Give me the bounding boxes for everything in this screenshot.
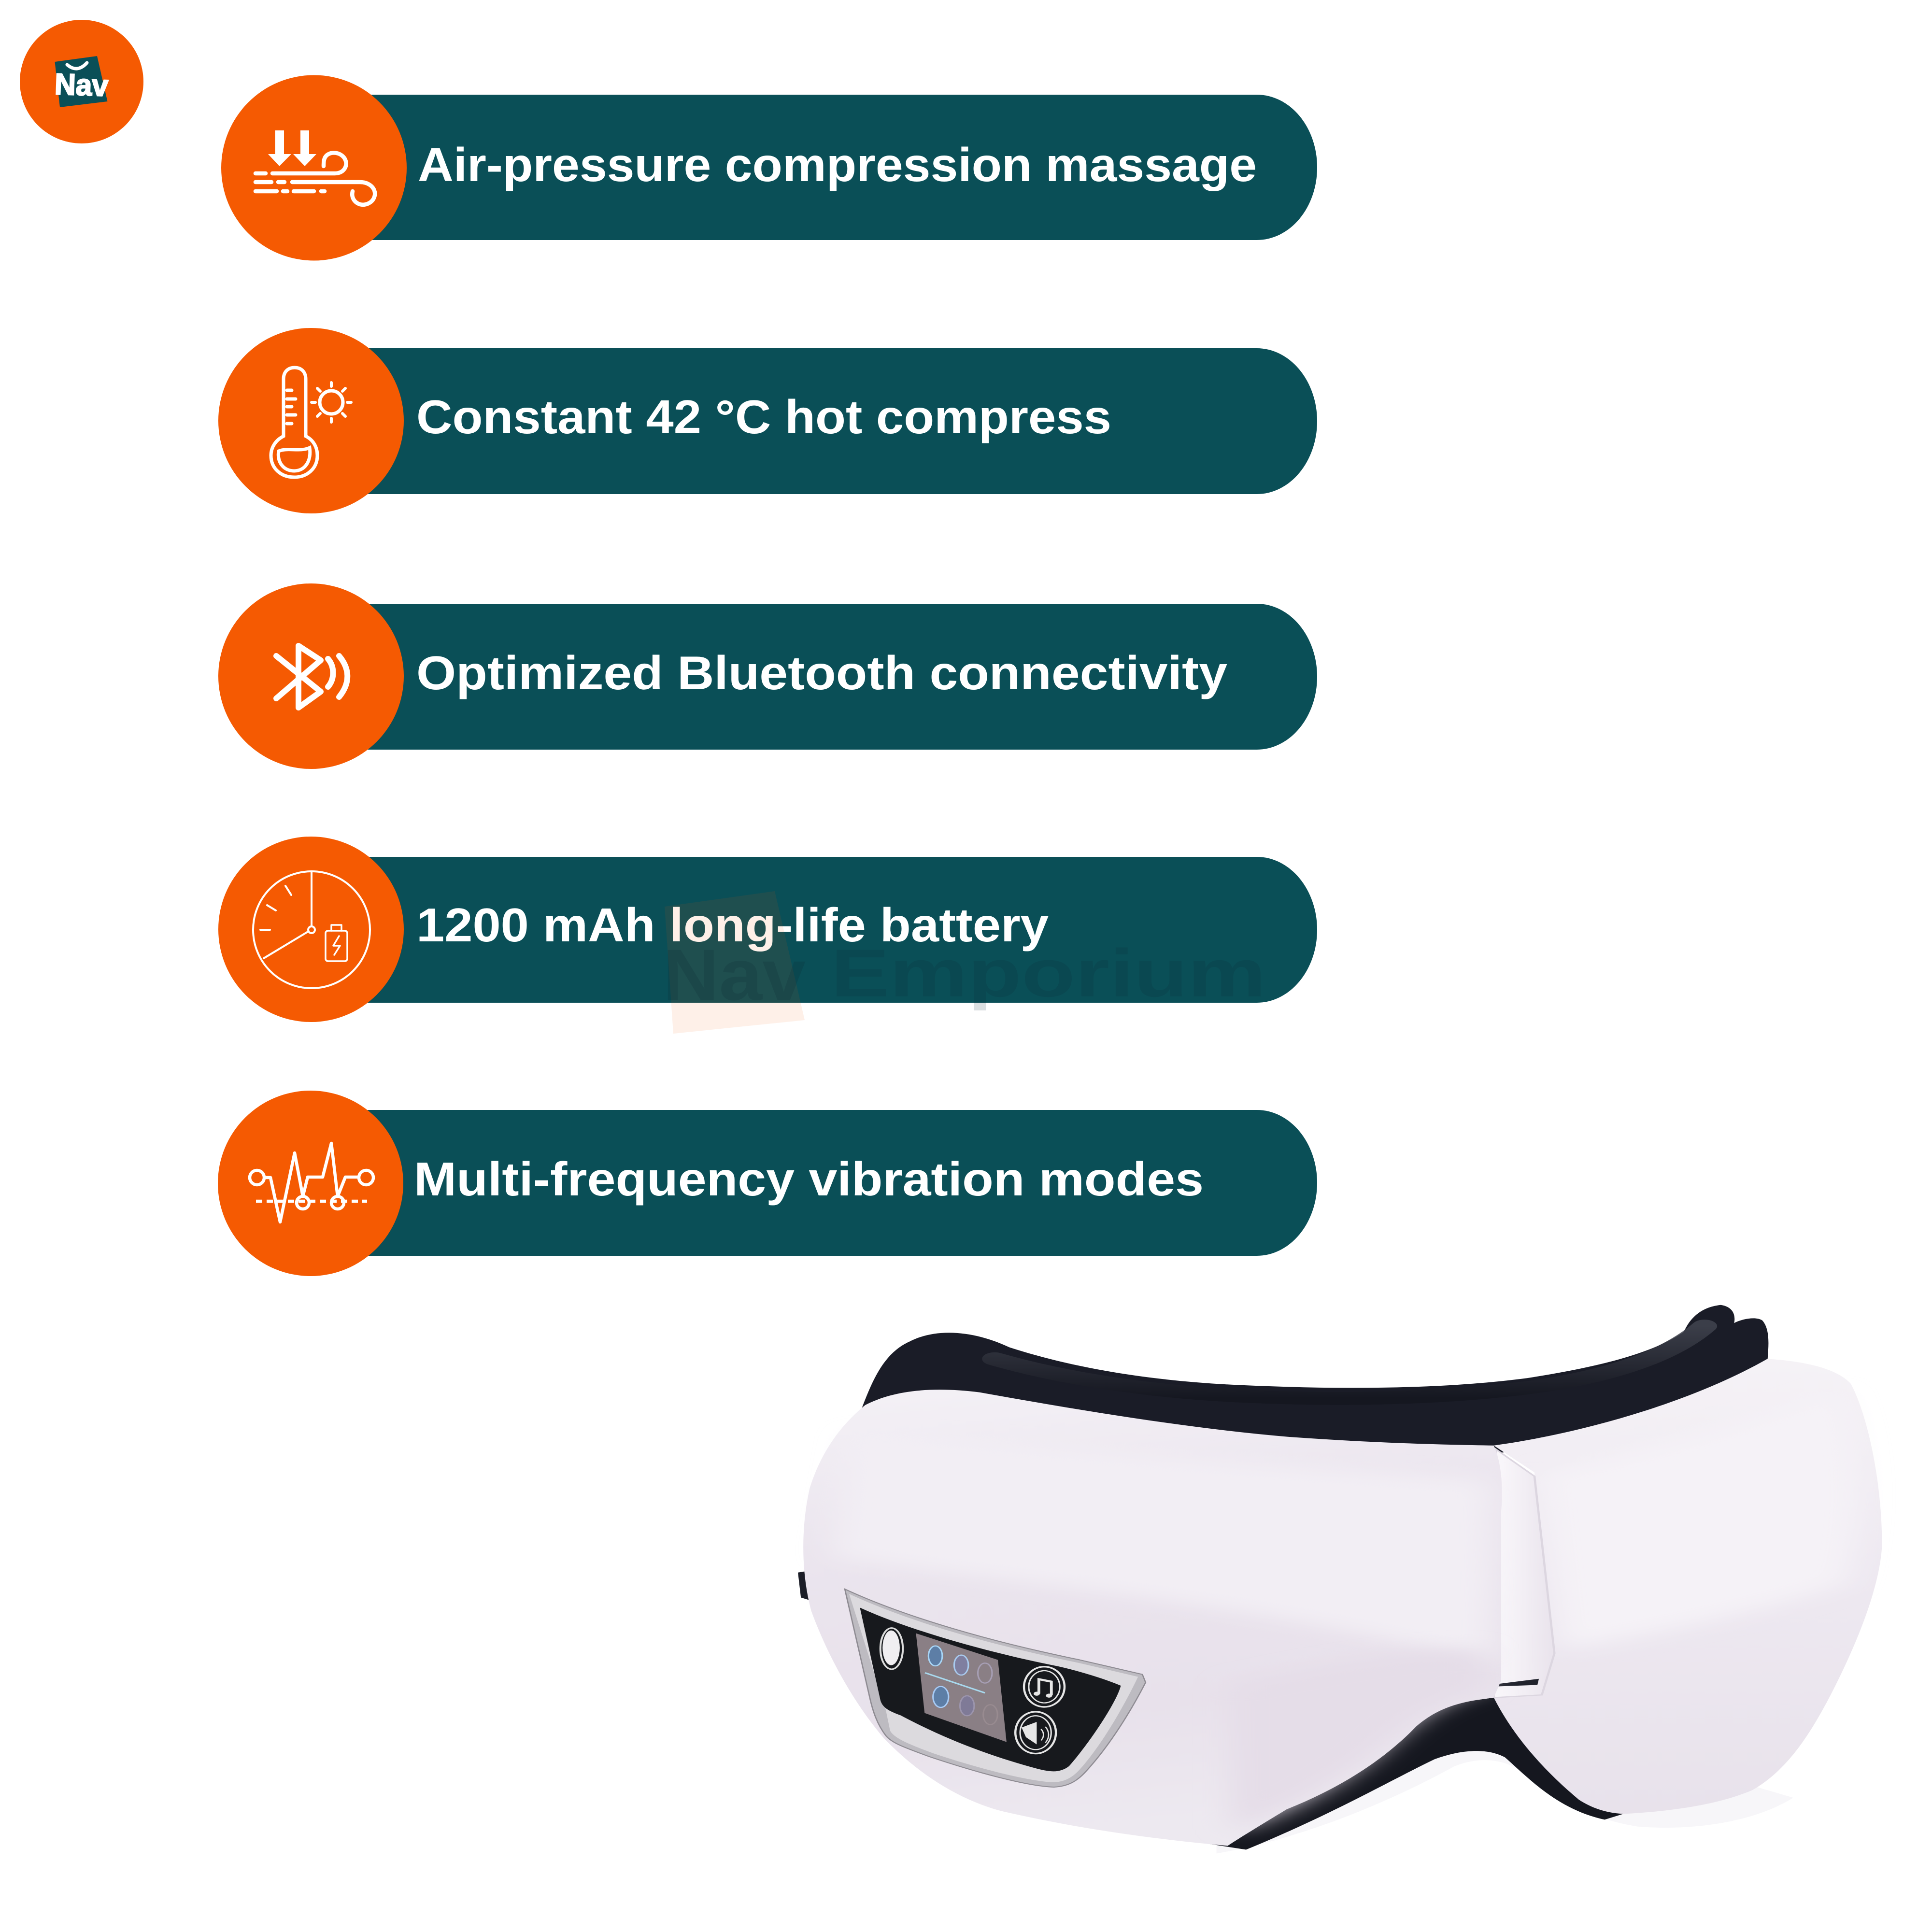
central hinge bbox=[1494, 1449, 1554, 1698]
screen icons bbox=[925, 1646, 997, 1725]
power button bbox=[881, 1628, 903, 1669]
control panel bbox=[845, 1589, 1146, 1787]
icon: clock and battery bbox=[218, 837, 404, 1022]
icon: vibration waveform bbox=[218, 1091, 403, 1276]
icon: bluetooth signal bbox=[218, 583, 404, 769]
left shell bbox=[803, 1390, 1502, 1846]
icon: thermometer and sun bbox=[218, 328, 404, 513]
icon: air pressure compression bbox=[221, 75, 407, 261]
strap highlight bbox=[994, 1326, 1705, 1398]
text: feature 4: 1200 mAh long-life battery bbox=[416, 898, 1049, 952]
logo badge bbox=[20, 20, 143, 143]
touch screen bbox=[916, 1634, 1007, 1742]
panel: feature 3 pill bbox=[309, 604, 1317, 750]
nose bridge black bbox=[1209, 1698, 1623, 1850]
panel bezel highlight bbox=[849, 1594, 1138, 1782]
text: feature 5: Multi-frequency vibration modes bbox=[414, 1152, 1204, 1206]
panel: feature 1 pill bbox=[309, 95, 1317, 240]
panel: feature 2 pill bbox=[309, 348, 1317, 494]
watermark: Emporium bbox=[831, 935, 1266, 1011]
nose pad underlay bbox=[1217, 1723, 1793, 1854]
product: eye massager bbox=[798, 1305, 1882, 1854]
logo badge: Nav bbox=[54, 68, 109, 103]
left shell lower shade bbox=[1231, 1649, 1483, 1831]
left strap nub bbox=[798, 1571, 813, 1601]
speaker button bbox=[1015, 1712, 1056, 1754]
right shell upper highlight bbox=[1542, 1392, 1857, 1649]
watermark: Nav bbox=[663, 934, 806, 1015]
panel: feature 4 pill bbox=[309, 857, 1317, 1003]
hinge black gap bbox=[1496, 1679, 1539, 1687]
text: feature 3: Optimized Bluetooth connectivity bbox=[416, 646, 1227, 699]
text: feature 1: Air-pressure compression massage bbox=[418, 138, 1257, 191]
panel silver bezel bbox=[845, 1589, 1146, 1787]
watermark bbox=[663, 891, 1266, 1034]
music button bbox=[1024, 1667, 1065, 1707]
panel black face bbox=[860, 1607, 1121, 1771]
black head strap bbox=[862, 1305, 1768, 1453]
right shell bbox=[1494, 1359, 1882, 1814]
text: feature 2: Constant 42 °C hot compress bbox=[416, 390, 1111, 443]
left shell glossy band bbox=[832, 1434, 1494, 1665]
panel: feature 5 pill bbox=[309, 1110, 1317, 1256]
